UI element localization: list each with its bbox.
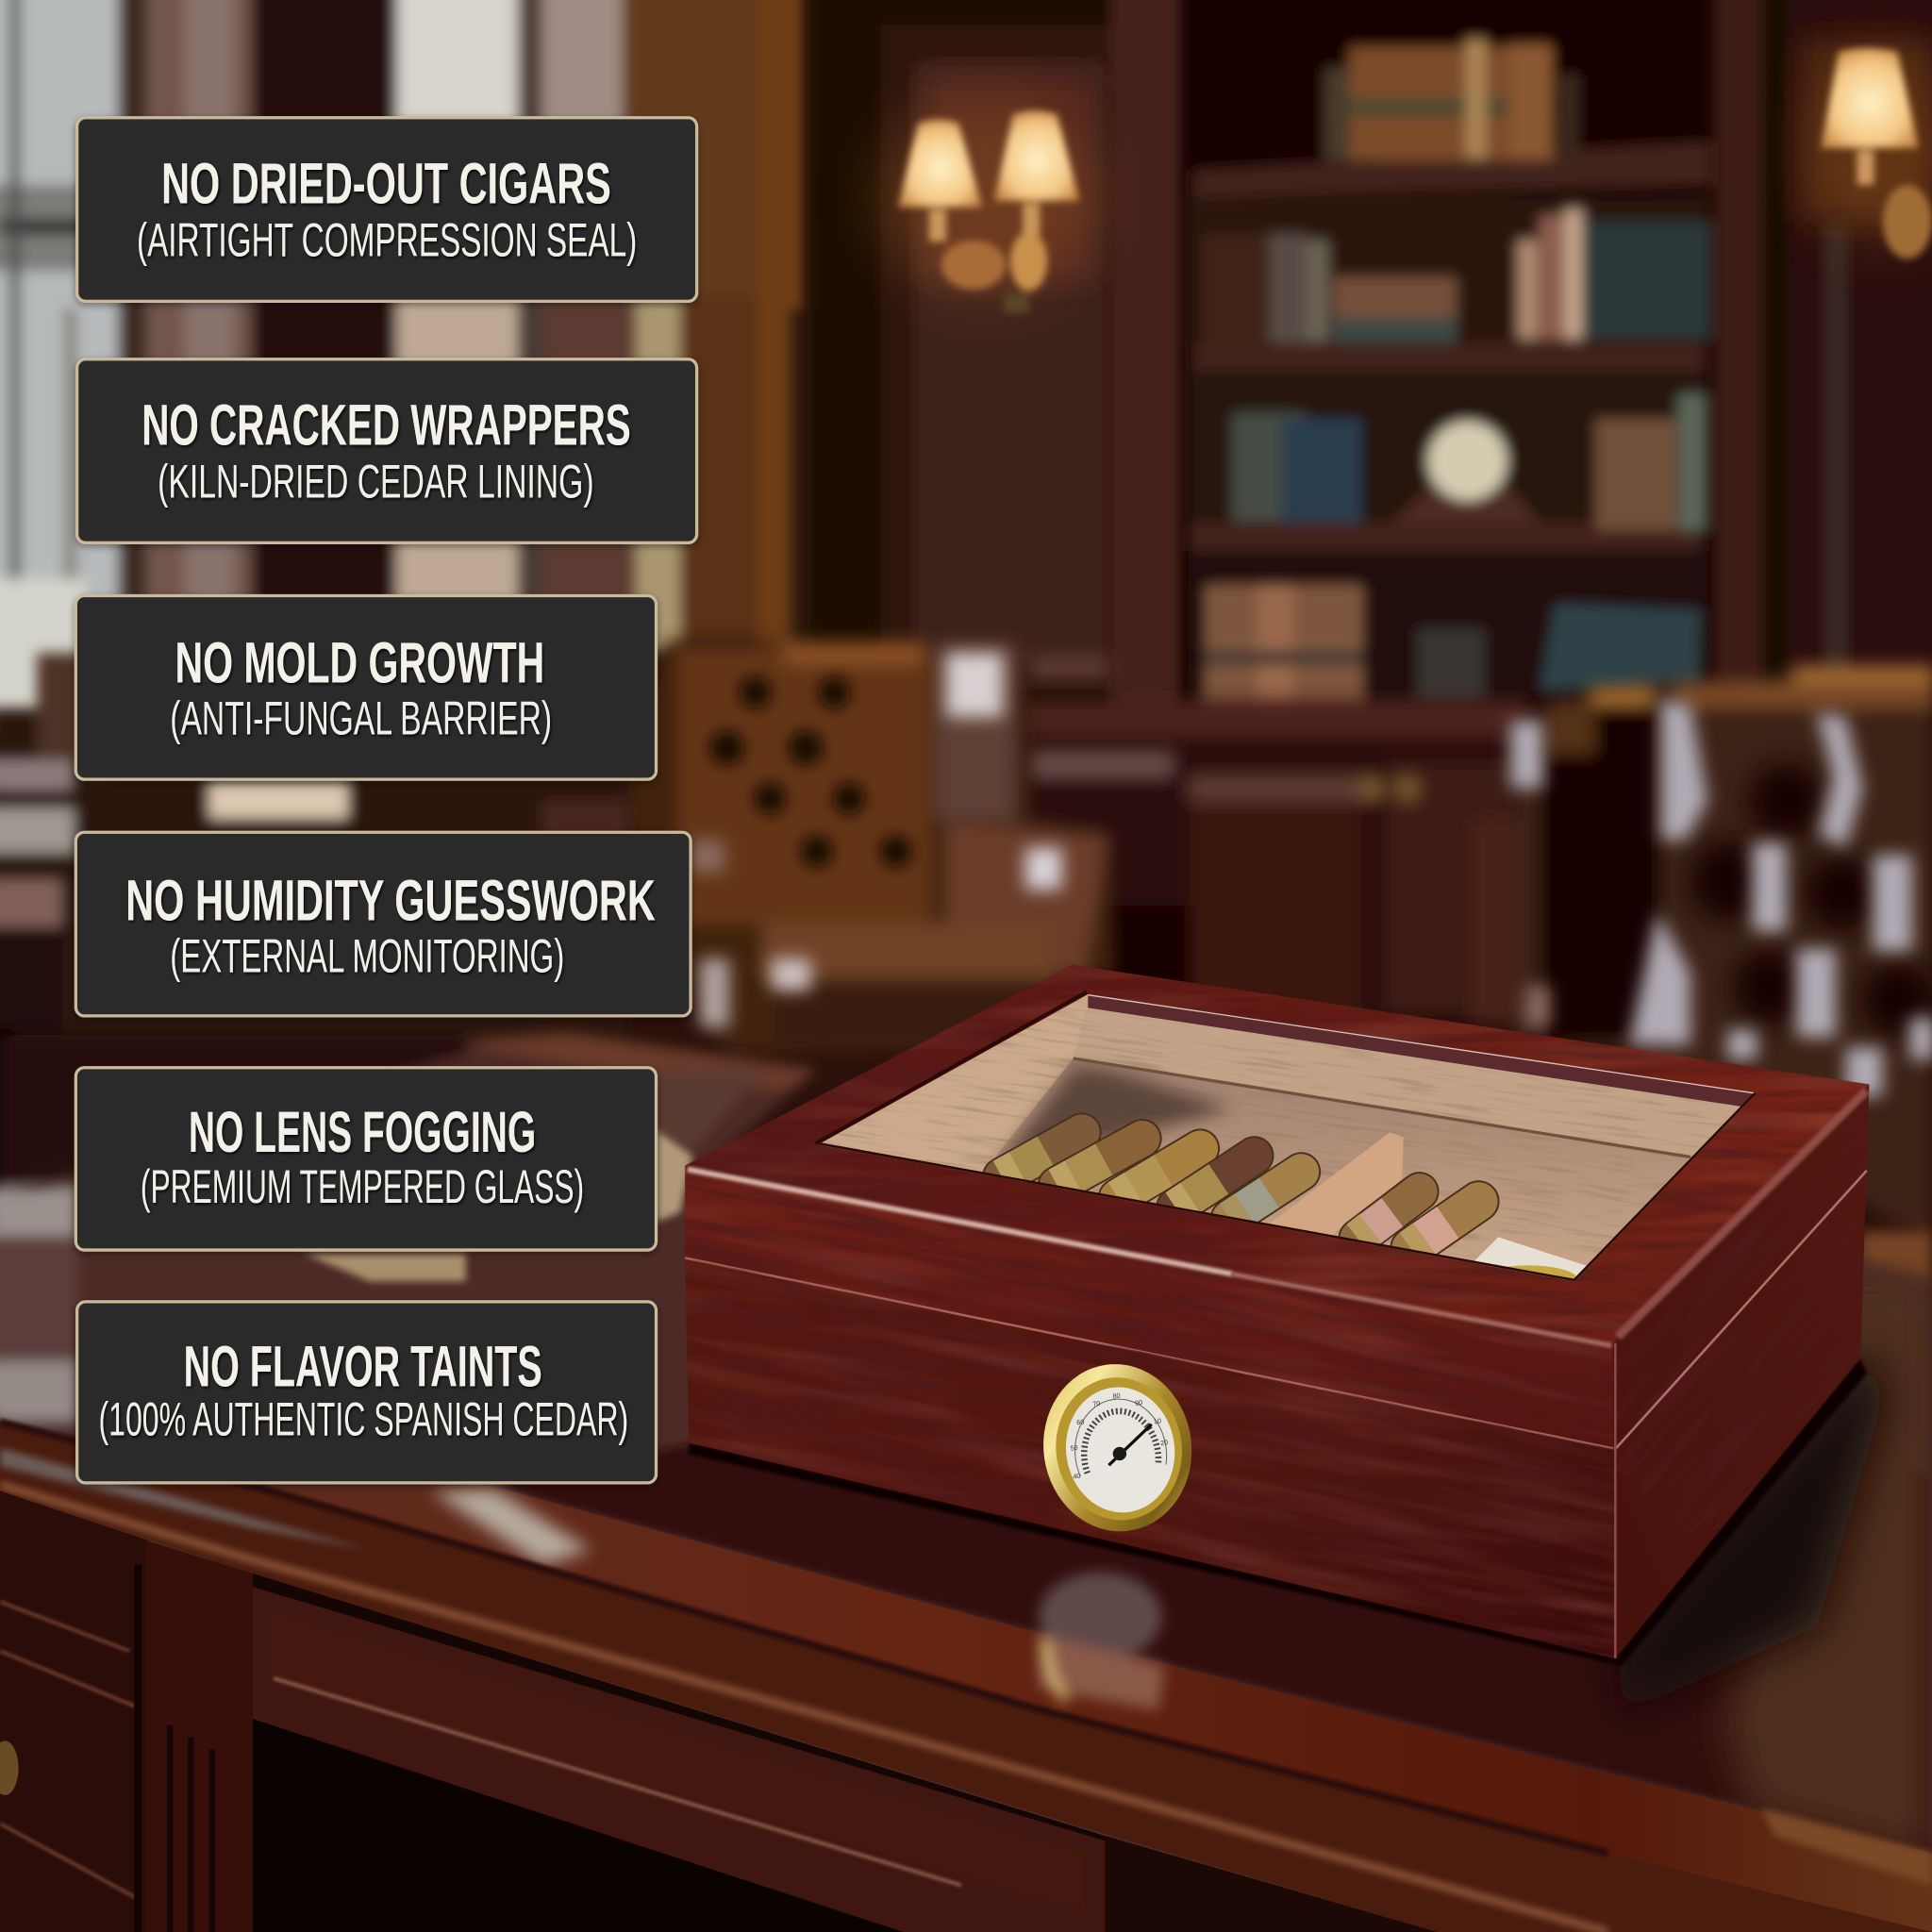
wood rim of desk [253, 1486, 1932, 1932]
heading 3: NO MOLD GROWTH [175, 631, 544, 696]
heading 1: NO DRIED-OUT CIGARS [161, 152, 611, 217]
subtext 3: (ANTI-FUNGAL BARRIER) [170, 691, 552, 744]
desk surface [0, 1033, 1932, 1932]
needle [1104, 1424, 1157, 1465]
window and curtains [0, 0, 813, 740]
far sconce glow [1805, 49, 1932, 246]
dial numbers: 80 [1112, 1392, 1121, 1401]
wall paneling [808, 0, 1932, 740]
open area under desk [253, 1719, 903, 1932]
sconce shades and brackets [898, 48, 1932, 313]
glass window with interior [819, 994, 1757, 1281]
cigars right group [1357, 1191, 1478, 1248]
chair buttons [709, 676, 912, 868]
inner ledge line [1074, 1058, 1690, 1157]
dial numbers: 70 [1092, 1400, 1101, 1408]
room left side furniture [0, 653, 628, 1189]
subtext 4: (EXTERNAL MONITORING) [170, 930, 564, 983]
subtext 2: (KILN-DRIED CEDAR LINING) [158, 456, 594, 508]
hygrometer gauge [1033, 1355, 1203, 1541]
subtext 1: (AIRTIGHT COMPRESSION SEAL) [137, 214, 637, 267]
gauge reflection on desk [1039, 1573, 1164, 1710]
dial numbers: 60 [1076, 1418, 1085, 1426]
box shadow on leather [1615, 1356, 1885, 1713]
dial numbers [1062, 1387, 1172, 1481]
dial numbers: 40 [1073, 1473, 1081, 1481]
seam line [685, 1258, 1615, 1449]
drawer and leg panels [0, 1491, 148, 1932]
base front face [600, 1214, 1665, 1724]
sconces [874, 48, 1932, 313]
panel 5: no lens fogging [75, 1068, 657, 1250]
heading 4: NO HUMIDITY GUESSWORK [125, 869, 656, 934]
inner hygrometer on floor [1472, 1237, 1589, 1281]
subtext 6: (100% AUTHENTIC SPANISH CEDAR) [98, 1393, 628, 1446]
warm leather at right [1725, 1276, 1932, 1860]
upper inner wall [1720, 1098, 1752, 1132]
window left bevel [816, 991, 1087, 1143]
glass top lip [1088, 994, 1757, 1108]
gold bezel [1033, 1355, 1203, 1541]
cigars left group [1002, 1132, 1301, 1219]
heading 2: NO CRACKED WRAPPERS [142, 393, 631, 458]
molding highlight [0, 1485, 1607, 1932]
reflection gray highlight on rim [431, 1489, 591, 1565]
shelves [1192, 142, 1710, 197]
left leather armchair [616, 641, 1115, 1054]
window lower bevel [818, 1093, 1757, 1281]
dial face [1058, 1380, 1183, 1520]
left wall [824, 1064, 1068, 1174]
glass edge highlight [1088, 994, 1757, 1093]
left chair highlights [690, 653, 1062, 1027]
desk front molding [0, 1422, 1932, 1932]
panel 2: no cracked wrappers [77, 359, 697, 542]
panel 4: no humidity guesswork [75, 832, 691, 1016]
tuft shadows [1690, 764, 1932, 1038]
shelf clock [1392, 487, 1541, 524]
lid front face [641, 1142, 1637, 1475]
subtext 5: (PREMIUM TEMPERED GLASS) [141, 1160, 584, 1213]
interior shadow [993, 1067, 1232, 1171]
warm wall glow [924, 37, 1932, 283]
dial numbers: 20 [1160, 1439, 1169, 1447]
dial numbers: 90 [1135, 1399, 1143, 1407]
books [1324, 68, 1349, 160]
dial numbers: 50 [1070, 1444, 1078, 1453]
right side [1455, 992, 1932, 1658]
desk [0, 1033, 1932, 1932]
rim far-right light [1762, 1808, 1932, 1885]
right tufted chair [1472, 665, 1932, 1244]
panel 1: no dried-out cigars [77, 118, 697, 301]
cedar grain [823, 1002, 1723, 1257]
box shadow contact [689, 1357, 1867, 1666]
panel 3: no mold growth [75, 596, 657, 779]
heading 5: NO LENS FOGGING [189, 1100, 536, 1165]
sconce glow [874, 98, 1096, 295]
panel 6: no flavor taints [77, 1302, 657, 1483]
bookcase [1183, 0, 1713, 715]
dial numbers: 10 [1153, 1417, 1162, 1425]
open book on desk [303, 1130, 692, 1281]
heading 6: NO FLAVOR TAINTS [184, 1334, 542, 1399]
leather inlay and right leather [491, 1306, 1932, 1853]
product: cigar humidor [685, 964, 1870, 1666]
lid top frame [685, 964, 1870, 1343]
back wall [979, 1058, 1690, 1281]
drawer knob [0, 1741, 19, 1795]
cedar divider [1263, 1132, 1404, 1241]
chair glossy highlights [1510, 700, 1932, 1096]
cabinet below bookcase [1023, 657, 1528, 1041]
dial scale [1078, 1407, 1159, 1474]
